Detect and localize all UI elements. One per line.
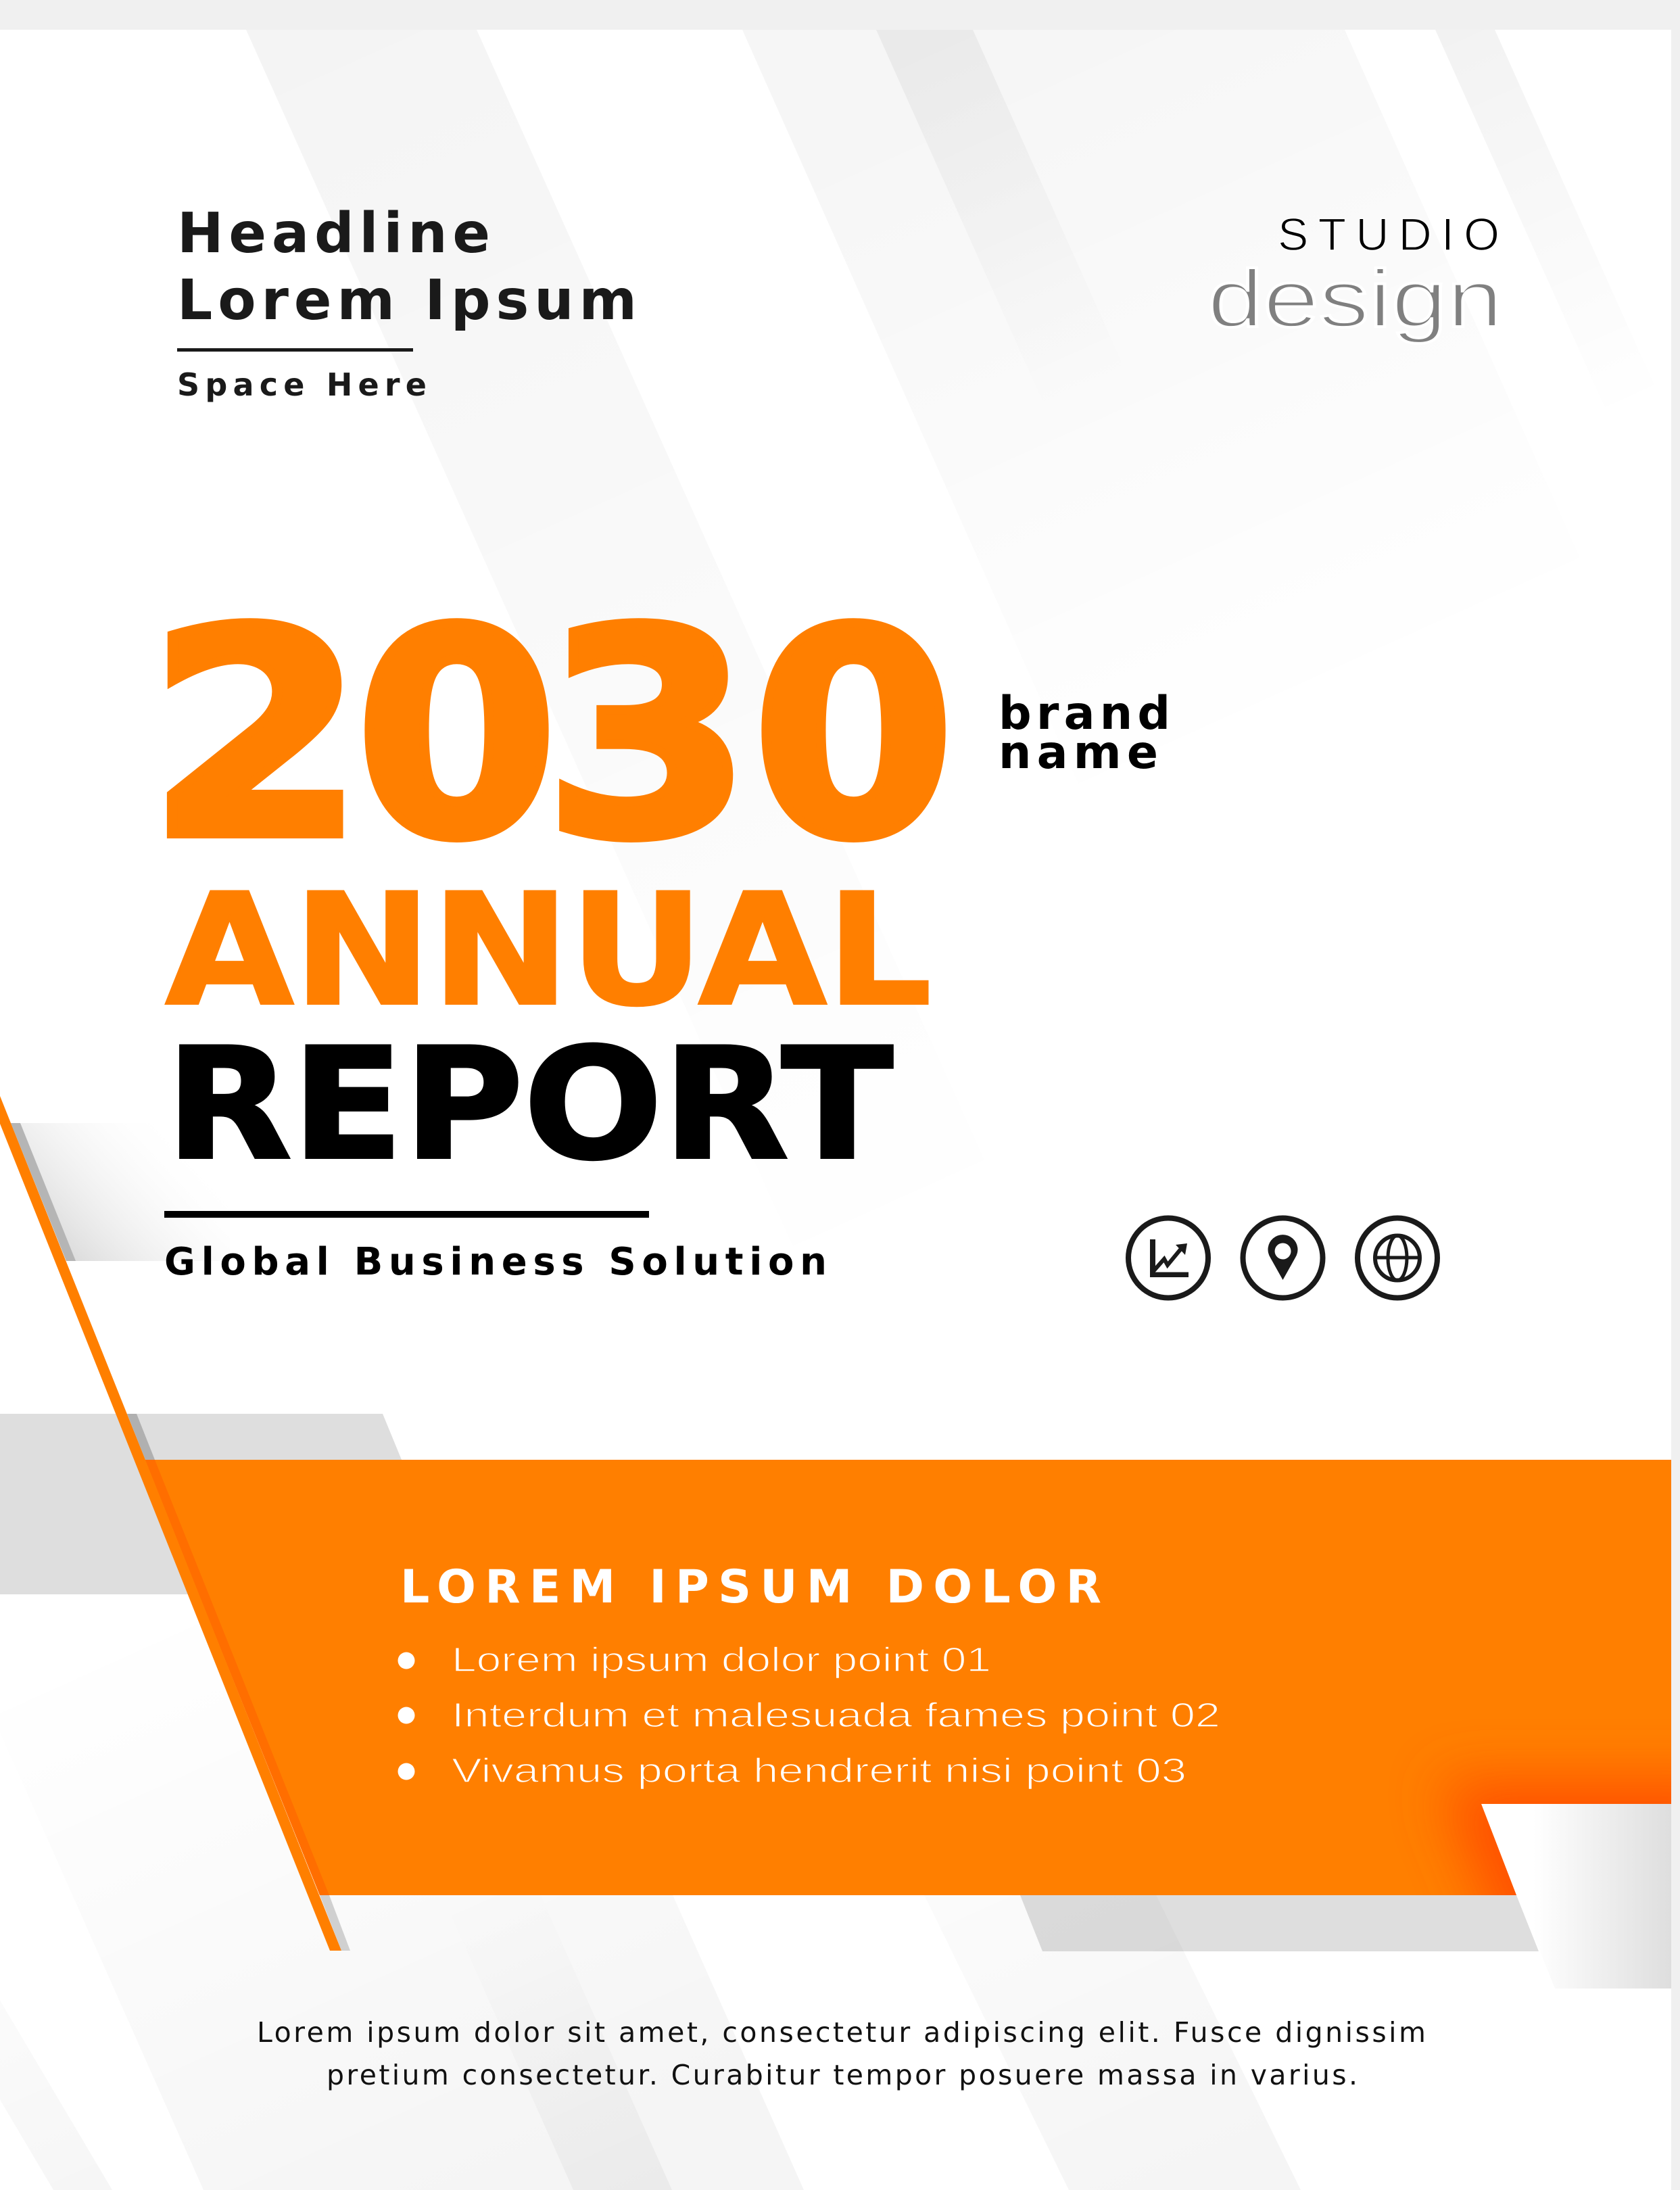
notch gradient block: [1481, 1804, 1671, 1989]
name: name: [999, 726, 1158, 780]
brand: brand: [999, 687, 1170, 740]
gray shadow strips beside orange stripe: [11, 1123, 350, 1951]
year 2030: 0: [356, 571, 558, 901]
bullet 1: Lorem ipsum dolor point 01: [452, 1640, 991, 1679]
icon: chart: [1128, 1218, 1208, 1298]
panel text: [398, 1561, 1220, 1790]
gray band: behind orange panel: [0, 1414, 402, 1594]
orange diagonal stripe: [0, 1096, 341, 1951]
year 2030: [147, 571, 955, 901]
footer line 2: pretium consectetur. Curabitur tempor posuere massa in varius.: [327, 2059, 1358, 2091]
background diagonal stripes: top: [246, 30, 1547, 343]
gray band: upper left: [11, 1123, 230, 1261]
studio word: STUDIO: [1278, 209, 1499, 260]
report: REPORT: [166, 1015, 893, 1194]
year 2030: 2: [147, 571, 365, 901]
darker overlap strip: [145, 1460, 329, 1895]
headline subtitle: Space Here: [177, 366, 427, 403]
headline rule: [177, 348, 413, 352]
brand name: [999, 687, 1170, 780]
footer line 1: Lorem ipsum dolor sit amet, consectetur adipiscing elit. Fusce dignissim: [257, 2016, 1426, 2049]
gray band: under orange panel: [1020, 1895, 1539, 1951]
design word: design: [1207, 254, 1503, 344]
icon: location pin: [1243, 1218, 1322, 1298]
bullet 3: Vivamus porta hendrerit nisi point 03: [452, 1751, 1186, 1790]
title rule: [164, 1211, 649, 1218]
background diagonal stripes: bottom: [50, 1910, 1301, 2190]
footer text: [257, 2016, 1426, 2091]
panel heading: LOREM IPSUM DOLOR: [400, 1561, 1101, 1614]
annual: ANNUAL: [166, 861, 932, 1040]
bullet 2: Interdum et malesuada fames point 02: [452, 1696, 1220, 1734]
year 2030: 3: [544, 571, 752, 901]
orange panel: [145, 1460, 1671, 1895]
headline block: [177, 201, 637, 403]
icon: globe: [1358, 1218, 1437, 1298]
headline line 2: Lorem Ipsum: [177, 268, 637, 333]
year 2030: 0: [752, 571, 955, 901]
tagline: Global Business Solution: [164, 1240, 827, 1284]
studio logo: [1207, 209, 1503, 344]
panel glow near notch: [1429, 1755, 1671, 1895]
headline line 1: Headline: [177, 201, 490, 266]
